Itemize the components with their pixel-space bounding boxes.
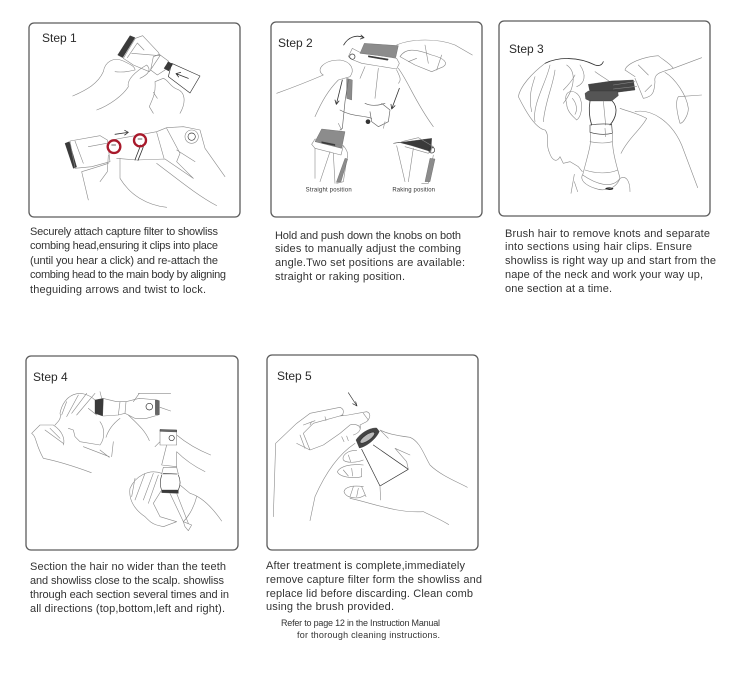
text: step 3 description: showliss is right way up and start from the xyxy=(505,255,716,267)
text: step 2 description: straight or raking position. xyxy=(275,271,405,283)
text: step 2 description: sides to manually adjust the combing xyxy=(275,243,461,255)
text: step 1 description: combing head,ensuring it clips into place xyxy=(30,240,218,252)
illustration: adjusting the combing angle: Raking position xyxy=(392,187,435,193)
illustration: adjusting the combing angle: Straight position xyxy=(306,188,352,194)
text: step 1 description: (until you hear a click) and re-attach the xyxy=(30,255,218,267)
note: cleaning reference: Refer to page 12 in the Instruction Manual xyxy=(281,618,440,628)
text: step 4 description: through each section several times and in xyxy=(30,589,229,601)
text: step 3 description: nape of the neck and work your way up, xyxy=(505,269,703,281)
heading: step 5: Step 5 xyxy=(277,369,312,383)
illustration: removing the capture filter xyxy=(273,393,467,525)
text: step 4 description: Section the hair no wider than the teeth xyxy=(30,561,226,573)
panel: step 4 xyxy=(26,356,238,550)
text: step 2 description xyxy=(275,230,465,283)
panel: step 5 xyxy=(267,355,478,550)
text: step 4 description: and showliss close to the scalp. showliss xyxy=(30,575,224,587)
note: cleaning reference xyxy=(281,618,440,640)
text: step 3 description xyxy=(505,228,716,295)
text: step 3 description: into sections using hair clips. Ensure xyxy=(505,241,692,253)
text: step 4 description xyxy=(30,561,229,615)
heading: step 1: Step 1 xyxy=(42,31,77,45)
text: step 2 description: angle.Two set positions are available: xyxy=(275,257,465,269)
text: step 3 description: Brush hair to remove knots and separate xyxy=(505,228,710,240)
panel: step 2 xyxy=(271,22,482,217)
text: step 2 description: Hold and push down the knobs on both xyxy=(275,230,461,242)
note: cleaning reference: for thorough cleaning instructions. xyxy=(297,630,440,640)
text: step 5 description: replace lid before discarding. Clean comb xyxy=(266,588,473,600)
panel: step 3 xyxy=(499,21,710,216)
illustration: attaching capture filter and combing head xyxy=(65,36,225,207)
heading: step 4: Step 4 xyxy=(33,370,68,384)
text: step 5 description xyxy=(266,560,482,613)
illustration: adjusting the combing angle xyxy=(277,35,472,194)
text: step 1 description xyxy=(30,226,226,296)
text: step 1 description: combing head to the main body by aligning xyxy=(30,269,226,281)
illustration: combing hair sections at the scalp xyxy=(32,392,222,531)
text: step 5 description: After treatment is complete,immediately xyxy=(266,560,466,572)
text: step 5 description: remove capture filter form the showliss and xyxy=(266,574,482,586)
text: step 1 description: theguiding arrows and twist to lock. xyxy=(30,284,206,296)
text: step 3 description: one section at a time. xyxy=(505,283,612,295)
illustration: brushing hair from the nape upward xyxy=(518,56,702,193)
heading: step 2: Step 2 xyxy=(278,36,313,50)
text: step 4 description: all directions (top,bottom,left and right). xyxy=(30,603,225,615)
heading: step 3: Step 3 xyxy=(509,42,544,56)
panel: step 1 xyxy=(29,23,240,217)
text: step 1 description: Securely attach capture filter to showliss xyxy=(30,226,218,238)
text: step 5 description: using the brush provided. xyxy=(266,601,394,613)
